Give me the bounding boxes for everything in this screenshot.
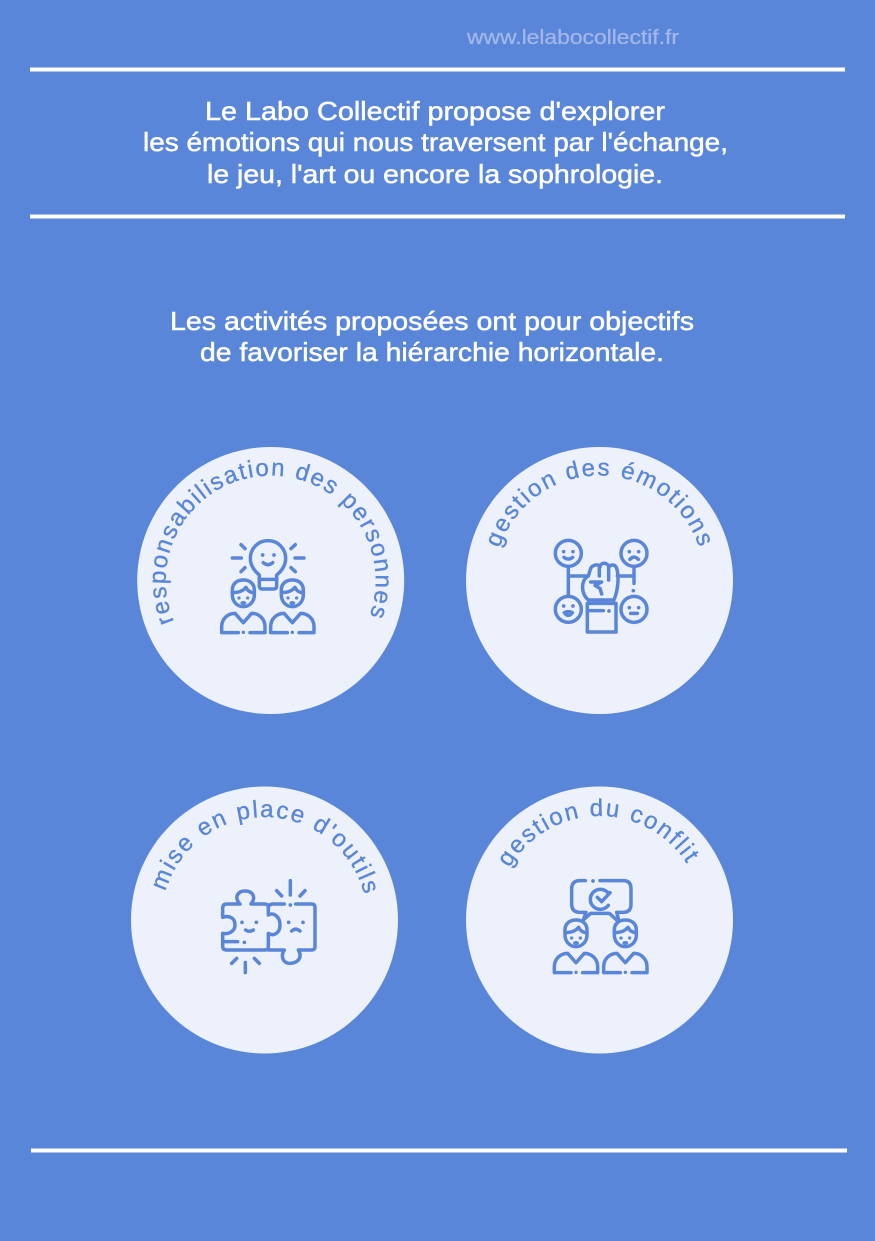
objectives text block: Les activités proposées ont pour objectifs [170, 306, 694, 336]
icon: light bulb and two people [222, 541, 314, 634]
bottom divider [31, 1148, 847, 1152]
objectives text block: de favoriser la hiérarchie horizontale. [200, 337, 664, 367]
panel: responsabilisation des personnes [137, 447, 404, 714]
second divider [30, 214, 845, 218]
intro text block [143, 96, 728, 189]
panel: gestion des émotions [466, 447, 733, 714]
icon: speech bubble and two people [554, 879, 647, 974]
curved label: mise en place d'outils: mise en place d'outils [154, 800, 376, 893]
objectives text block [170, 306, 694, 367]
icon: raised fist and four faces [555, 540, 647, 632]
intro text block: le jeu, l'art ou encore la sophrologie. [207, 159, 663, 189]
curved label: gestion du conflit: gestion du conflit [500, 798, 698, 868]
intro text block: les émotions qui nous traversent par l'échange, [143, 127, 728, 157]
panel: gestion du conflit [466, 786, 733, 1054]
intro text block: Le Labo Collectif propose d'explorer [205, 96, 665, 126]
panel: mise en place d'outils [131, 786, 398, 1054]
website url: www.lelabocollectif.fr [466, 26, 679, 49]
curved label: responsabilisation des personnes: responsabilisation des personnes [152, 460, 389, 625]
icon: two puzzle pieces [223, 881, 315, 973]
top divider [30, 68, 845, 72]
curved label: gestion des émotions: gestion des émotions [488, 460, 710, 548]
